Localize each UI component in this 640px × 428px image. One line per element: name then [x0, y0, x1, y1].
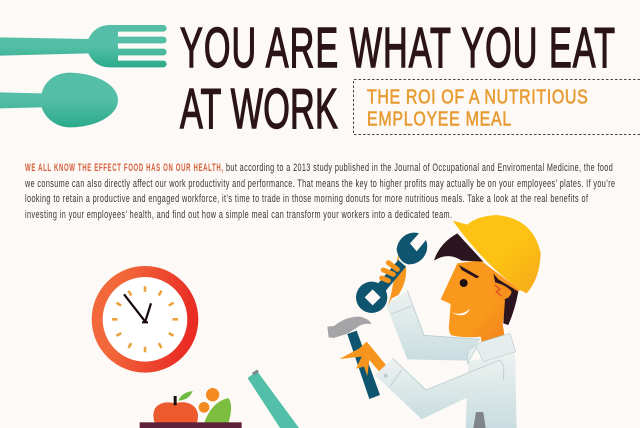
front hair	[434, 233, 483, 262]
icon: spoon	[0, 73, 118, 127]
title: YOU ARE WHAT YOU EAT	[180, 15, 615, 79]
intro text block: but according to a 2013 study published in the Journal of Occupational and Enviromental Medicine, the food	[226, 162, 613, 173]
subtitle: EMPLOYEE MEAL	[367, 107, 511, 130]
intro text block: WE ALL KNOW THE EFFECT FOOD HAS ON OUR HEALTH,	[25, 161, 223, 173]
subtitle: THE ROI OF A NUTRITIOUS	[367, 85, 588, 108]
intro text block: investing in your employees’ health, and find out how a simple meal can transform your workers into a dedicated team.	[25, 209, 452, 220]
tie	[473, 412, 486, 428]
hard hat	[453, 215, 541, 293]
illustration: construction worker	[327, 215, 541, 428]
intro text block: looking to retain a productive and engaged workforce, it’s time to trade in those morning donuts for more nutritious meals. Take a look at the real benefits of	[25, 193, 588, 204]
torso	[466, 350, 517, 428]
collar	[467, 333, 516, 364]
eyebrow	[459, 265, 479, 278]
icon: rolled plan	[248, 370, 299, 428]
title	[180, 15, 615, 140]
ear	[493, 282, 512, 299]
icon: fruit bowl	[140, 388, 242, 428]
raised arm	[386, 291, 480, 361]
lower arm	[375, 358, 504, 419]
wrench	[356, 233, 427, 313]
title: AT WORK	[180, 76, 338, 140]
fingers	[382, 263, 397, 281]
face	[441, 260, 520, 342]
apple	[153, 402, 198, 423]
back hair	[493, 273, 518, 325]
oranges	[206, 388, 219, 401]
icon: fork	[0, 25, 167, 67]
pear	[204, 398, 231, 423]
icon: clock	[92, 266, 198, 373]
lower hand	[339, 342, 386, 376]
subtitle box	[354, 80, 640, 134]
subtitle	[367, 85, 588, 130]
tray	[140, 422, 242, 428]
intro text block	[24, 161, 615, 220]
intro text block: we consume can also directly affect our work productivity and performance. That means the key to higher profits may actually be on your employees’ plates. If you’re	[24, 178, 615, 189]
hammer	[327, 317, 380, 399]
eye	[460, 279, 468, 287]
upper hand	[388, 253, 406, 305]
smile	[451, 309, 470, 315]
